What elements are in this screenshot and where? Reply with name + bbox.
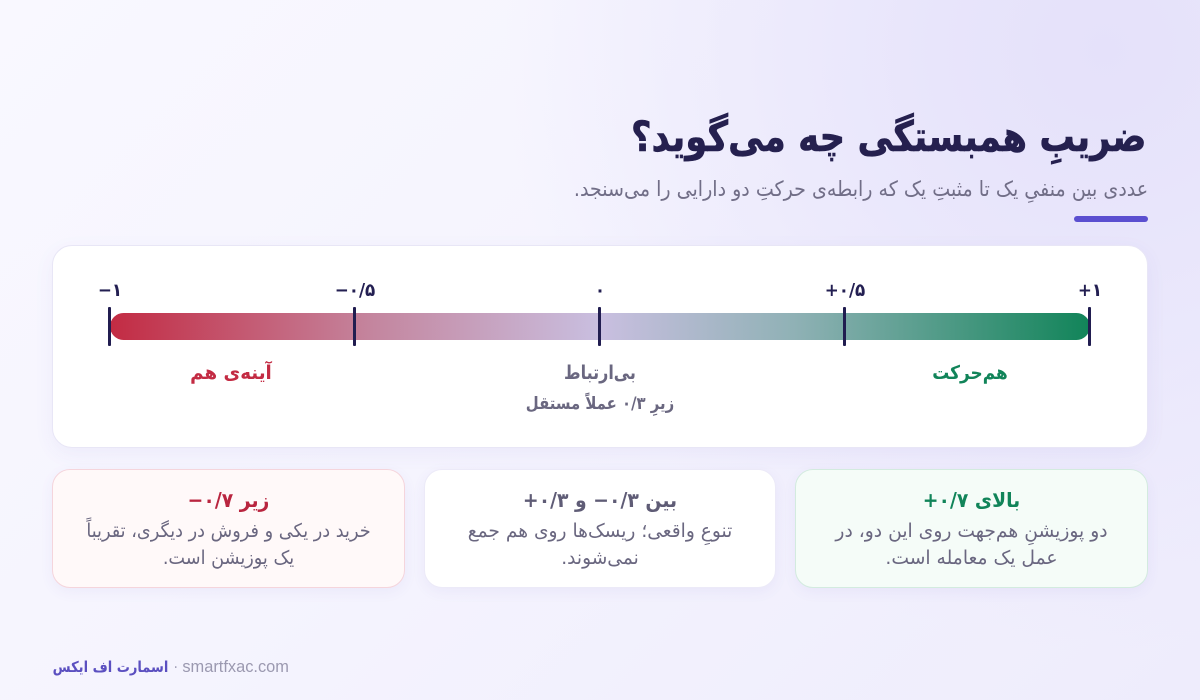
text: above +0.7 bbox=[834, 520, 1108, 569]
heading: between: بین ۰/۳− و ۰/۳+ bbox=[523, 488, 677, 512]
scale numbers bbox=[98, 280, 1102, 301]
panel: above +0.7 bbox=[795, 469, 1148, 588]
scale numbers: +۱ bbox=[1078, 280, 1102, 301]
footer bbox=[53, 658, 289, 676]
scale numbers: +۰/۵ bbox=[825, 280, 865, 301]
text: below -0.7: خرید در یکی و فروش در دیگری، تقریباً bbox=[86, 520, 371, 542]
text: between: تنوعِ واقعی؛ ریسک‌ها روی هم جمع bbox=[468, 520, 732, 542]
heading: below -0.7: زیر ۰/۷− bbox=[188, 488, 269, 512]
gradient bar bbox=[110, 313, 1090, 340]
subtitle: عددی بین منفیِ یک تا مثبتِ یک که رابطه‌ی حرکتِ دو دارایی را می‌سنجد. bbox=[574, 177, 1148, 201]
panel: correlation scale bbox=[52, 245, 1148, 448]
footer: · smartfxac.com bbox=[173, 658, 289, 676]
panel: between -0.3 and +0.3 bbox=[424, 469, 776, 588]
label: mirror: آینه‌ی هم bbox=[190, 362, 272, 384]
scale numbers: −۰/۵ bbox=[335, 280, 375, 301]
scale ticks bbox=[108, 307, 1091, 346]
footer: اسمارت اف ایکس bbox=[53, 658, 168, 676]
text: below -0.7: یک پوزیشن است. bbox=[163, 547, 294, 569]
heading: above +0.7: بالای ۰/۷+ bbox=[923, 488, 1020, 512]
text: between: نمی‌شوند. bbox=[561, 547, 639, 569]
note: below 0.3: زیرِ ۰/۳ عملاً مستقل bbox=[526, 394, 674, 414]
panel: below -0.7 bbox=[52, 469, 405, 588]
text: above +0.7: دو پوزیشنِ هم‌جهت روی این دو، در bbox=[835, 520, 1108, 542]
text: below -0.7 bbox=[86, 517, 371, 569]
title: ضریبِ همبستگی چه می‌گوید؟ bbox=[631, 112, 1146, 161]
scale numbers: ۰ bbox=[595, 280, 605, 301]
scale numbers: −۱ bbox=[98, 280, 122, 301]
label: co-moving: هم‌حرکت bbox=[932, 362, 1008, 384]
text: above +0.7: عمل یک معامله است. bbox=[885, 547, 1058, 569]
accent bar bbox=[1074, 216, 1148, 222]
label: uncorrelated: بی‌ارتباط bbox=[564, 362, 636, 384]
text: between bbox=[468, 520, 732, 569]
